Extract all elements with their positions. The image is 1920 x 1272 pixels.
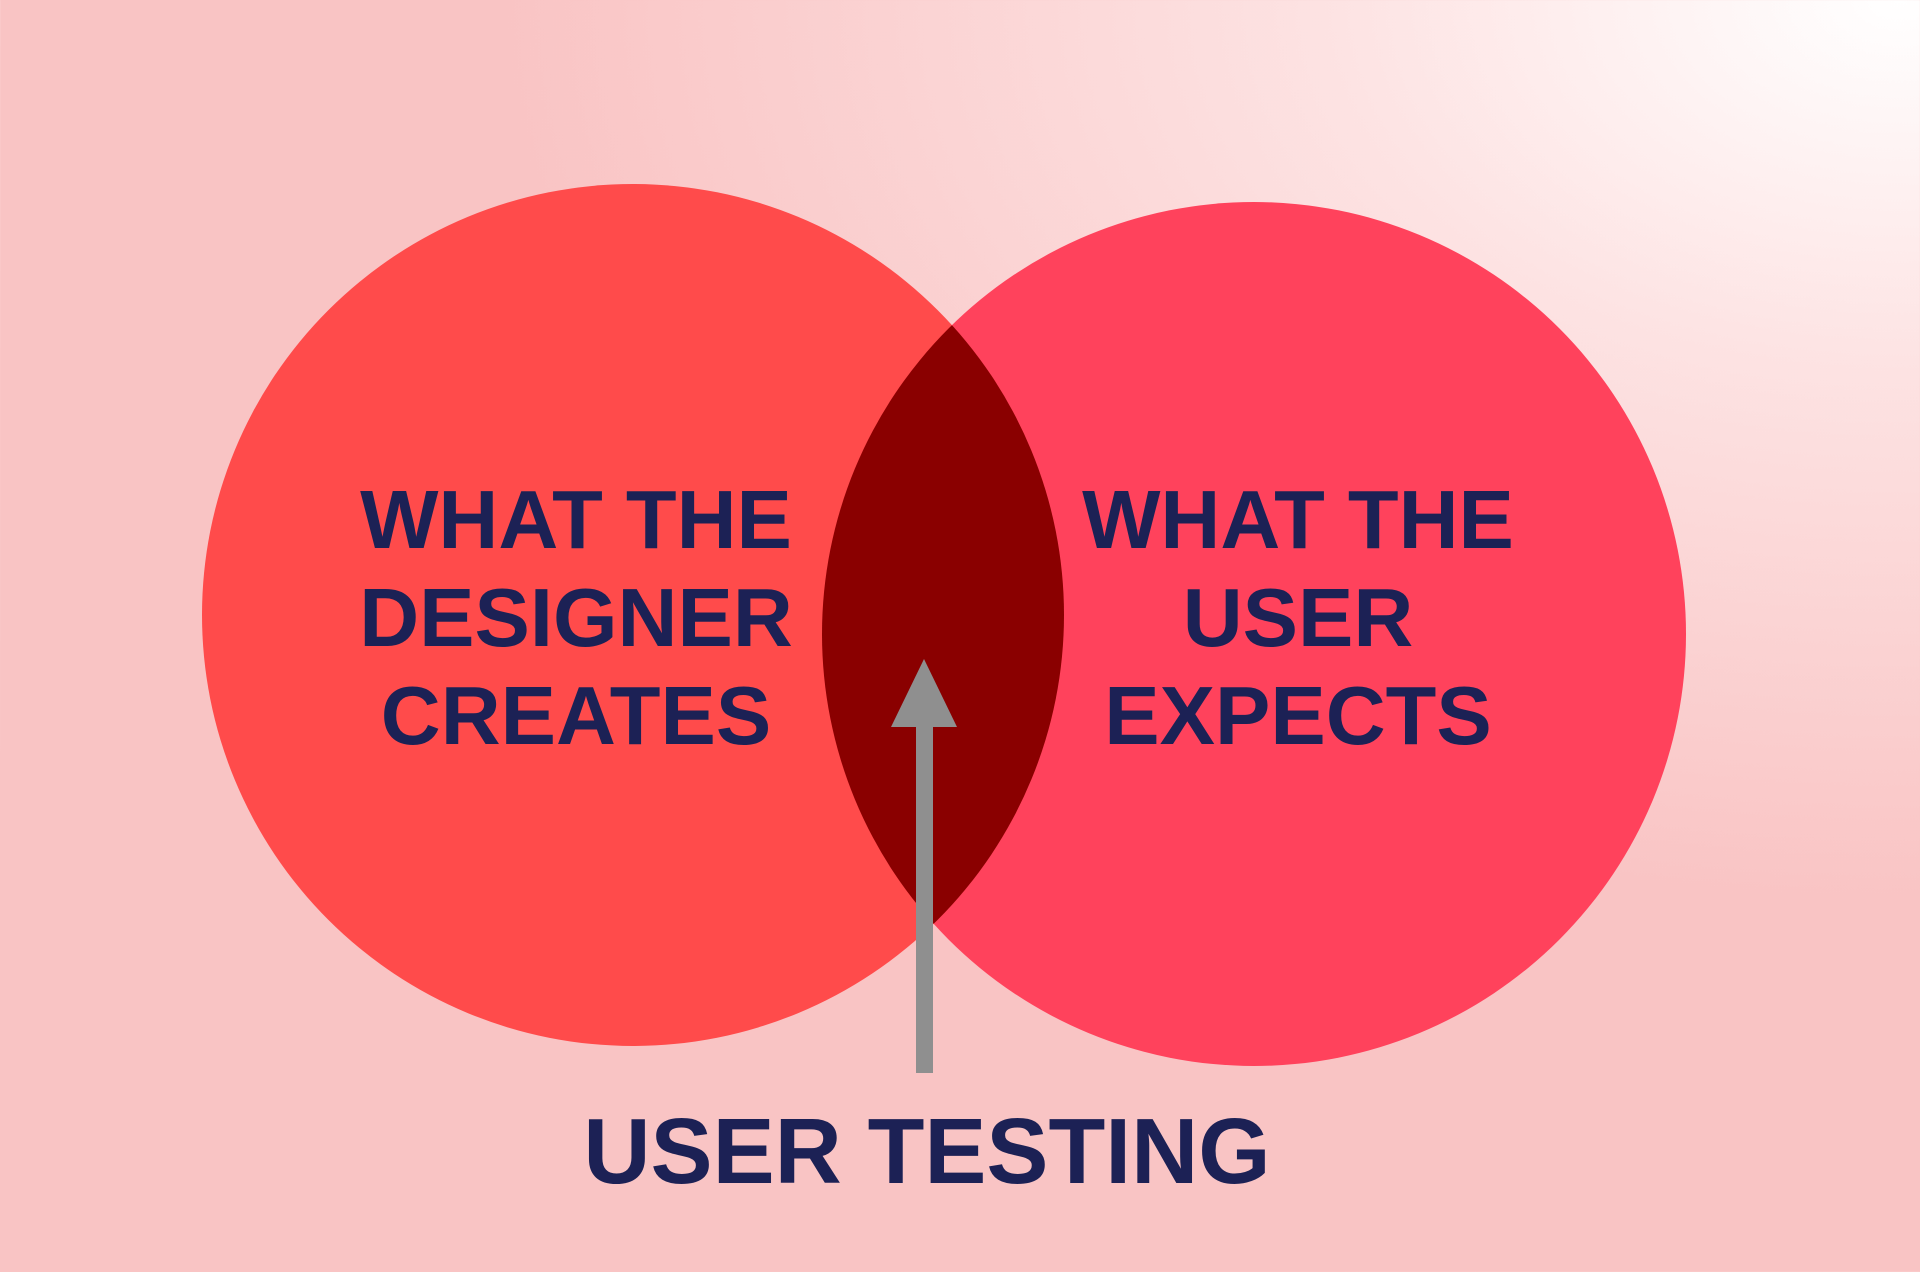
overlap lens xyxy=(822,325,1064,924)
right label xyxy=(1082,473,1514,762)
left label xyxy=(359,473,793,762)
left label: WHAT THE xyxy=(360,473,792,566)
arrow xyxy=(891,659,957,1073)
right label: EXPECTS xyxy=(1104,669,1492,762)
left circle: designer xyxy=(202,184,1064,1046)
right label: WHAT THE xyxy=(1082,473,1514,566)
bottom label: user testing: USER TESTING xyxy=(583,1099,1271,1203)
left label: DESIGNER xyxy=(359,571,793,664)
right label: USER xyxy=(1183,571,1413,664)
left label: CREATES xyxy=(381,669,771,762)
right circle: user xyxy=(822,202,1686,1066)
